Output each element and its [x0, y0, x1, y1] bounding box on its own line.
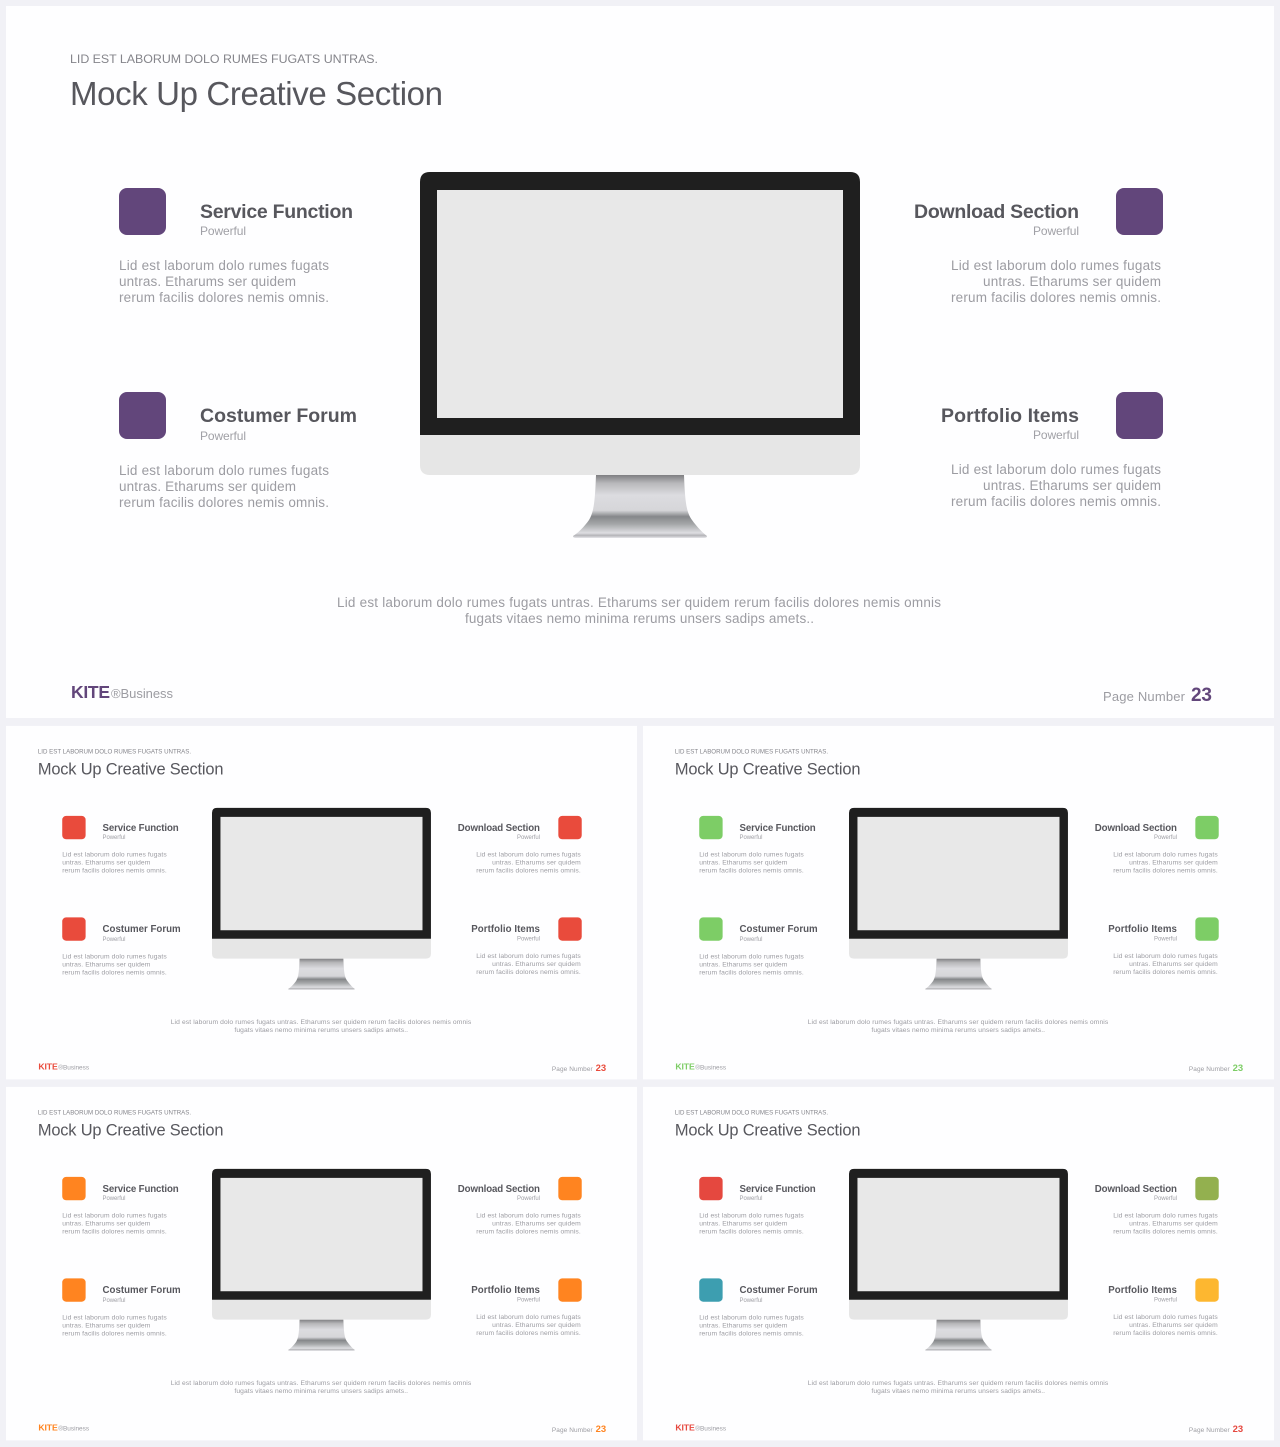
body text: rerum facilis dolores nemis omnis. [62, 969, 167, 976]
body text: rerum facilis dolores nemis omnis. [476, 868, 581, 875]
icon: rounded square [699, 1278, 723, 1302]
brand logo: KITE [38, 1422, 58, 1432]
heading: Download Section [1095, 823, 1177, 834]
body text: untras. Etharums ser quidem [1129, 860, 1218, 867]
feature: Download Section [1095, 1177, 1219, 1236]
icon: rounded square [1195, 816, 1219, 839]
slide: small orange [6, 1087, 637, 1440]
body text: untras. Etharums ser quidem [983, 478, 1161, 493]
subheading: Powerful [103, 1298, 125, 1304]
eyebrow text: LID EST LABORUM DOLO RUMES FUGATS UNTRAS. [675, 749, 828, 756]
body text: Lid est laborum dolo rumes fugats [62, 1315, 167, 1322]
monitor mockup [420, 172, 860, 538]
body text: untras. Etharums ser quidem [492, 1221, 581, 1228]
feature: Service Function [699, 816, 816, 875]
brand logo [38, 1422, 89, 1432]
icon: rounded square [1195, 1278, 1219, 1302]
eyebrow text: LID EST LABORUM DOLO RUMES FUGATS UNTRAS. [38, 749, 191, 756]
monitor mockup [849, 808, 1068, 990]
brand logo [675, 1061, 726, 1071]
body text: Lid est laborum dolo rumes fugats [476, 1314, 581, 1321]
icon: rounded square [62, 917, 86, 941]
feature: Download Section [458, 816, 582, 875]
body text: rerum facilis dolores nemis omnis. [951, 494, 1161, 509]
page number: 23 [596, 1063, 606, 1074]
body text: untras. Etharums ser quidem [1129, 1221, 1218, 1228]
footer paragraph: fugats vitaes nemo minima rerums unsers sadips amets.. [234, 1027, 408, 1034]
heading: Costumer Forum [740, 1285, 818, 1296]
body text [476, 1213, 581, 1236]
page number: Page Number [1103, 689, 1186, 704]
page number [1103, 685, 1212, 706]
body text: untras. Etharums ser quidem [492, 860, 581, 867]
body text: rerum facilis dolores nemis omnis. [1113, 1330, 1218, 1337]
subheading: Powerful [1033, 428, 1079, 442]
footer paragraph: fugats vitaes nemo minima rerums unsers sadips amets.. [465, 611, 814, 626]
body text: Lid est laborum dolo rumes fugats [699, 954, 804, 961]
body text: untras. Etharums ser quidem [1129, 1322, 1218, 1329]
brand logo: ®Business [111, 686, 174, 701]
brand logo: ®Business [58, 1063, 89, 1071]
icon: rounded square [119, 188, 166, 235]
icon: rounded square [62, 1278, 86, 1302]
body text: untras. Etharums ser quidem [1129, 961, 1218, 968]
body text: untras. Etharums ser quidem [119, 479, 296, 494]
body text: Lid est laborum dolo rumes fugats [951, 462, 1161, 477]
page number: 23 [596, 1424, 606, 1435]
body text: Lid est laborum dolo rumes fugats [119, 463, 329, 478]
body text: Lid est laborum dolo rumes fugats [1113, 852, 1218, 859]
body text: Lid est laborum dolo rumes fugats [62, 1213, 167, 1220]
heading: Costumer Forum [200, 405, 357, 427]
title: Mock Up Creative Section [38, 761, 223, 779]
heading: Portfolio Items [1108, 924, 1177, 935]
body text: rerum facilis dolores nemis omnis. [119, 495, 329, 510]
feature: Service Function [62, 816, 179, 875]
page number [552, 1424, 606, 1435]
body text [1113, 1314, 1218, 1337]
heading: Portfolio Items [941, 405, 1079, 427]
heading: Service Function [103, 1184, 179, 1195]
heading: Costumer Forum [740, 924, 818, 935]
subheading: Powerful [517, 937, 540, 943]
body text: untras. Etharums ser quidem [62, 860, 151, 867]
body text: untras. Etharums ser quidem [699, 1221, 788, 1228]
feature: Portfolio Items [941, 392, 1163, 509]
heading: Portfolio Items [471, 1285, 540, 1296]
feature: Costumer Forum [62, 917, 181, 976]
page number: Page Number [1189, 1066, 1231, 1073]
feature: Download Section [914, 188, 1163, 305]
feature: Portfolio Items [1108, 1278, 1219, 1337]
brand logo [38, 1061, 89, 1071]
body text: Lid est laborum dolo rumes fugats [951, 258, 1161, 273]
body text: rerum facilis dolores nemis omnis. [119, 290, 329, 305]
body text: rerum facilis dolores nemis omnis. [951, 290, 1161, 305]
brand logo [71, 682, 174, 702]
footer paragraph [808, 1380, 1109, 1395]
panel background [643, 726, 1274, 1079]
heading: Portfolio Items [471, 924, 540, 935]
body text: Lid est laborum dolo rumes fugats [476, 1213, 581, 1220]
slide: small red [6, 726, 637, 1079]
monitor mockup [212, 808, 431, 990]
body text [699, 1213, 804, 1236]
icon: rounded square [699, 1177, 723, 1200]
body text [951, 258, 1161, 305]
footer paragraph: Lid est laborum dolo rumes fugats untras. Etharums ser quidem rerum facilis dolores nemis omnis [171, 1019, 472, 1026]
brand logo: KITE [675, 1422, 695, 1432]
footer paragraph [171, 1019, 472, 1034]
icon: rounded square [558, 1278, 582, 1302]
body text: Lid est laborum dolo rumes fugats [476, 953, 581, 960]
heading: Service Function [103, 823, 179, 834]
eyebrow text: LID EST LABORUM DOLO RUMES FUGATS UNTRAS. [70, 52, 378, 66]
body text: rerum facilis dolores nemis omnis. [1113, 1229, 1218, 1236]
icon: rounded square [558, 1177, 582, 1200]
footer paragraph [808, 1019, 1109, 1034]
heading: Costumer Forum [103, 924, 181, 935]
brand logo: KITE [71, 682, 110, 702]
heading: Costumer Forum [103, 1285, 181, 1296]
body text [62, 954, 167, 976]
body text [1113, 1213, 1218, 1236]
feature: Costumer Forum [699, 1278, 818, 1337]
brand logo: KITE [38, 1061, 58, 1071]
heading: Portfolio Items [1108, 1285, 1177, 1296]
body text: Lid est laborum dolo rumes fugats [62, 954, 167, 961]
body text [62, 852, 167, 875]
footer paragraph: fugats vitaes nemo minima rerums unsers sadips amets.. [871, 1027, 1045, 1034]
icon: rounded square [558, 917, 582, 941]
title: Mock Up Creative Section [70, 75, 443, 112]
page number: 23 [1233, 1424, 1243, 1435]
subheading: Powerful [103, 835, 125, 841]
title: Mock Up Creative Section [675, 1122, 860, 1140]
heading: Download Section [458, 823, 540, 834]
subheading: Powerful [517, 1196, 540, 1202]
panel background [643, 1087, 1274, 1440]
body text [62, 1315, 167, 1337]
footer paragraph: fugats vitaes nemo minima rerums unsers sadips amets.. [234, 1388, 408, 1395]
footer paragraph: Lid est laborum dolo rumes fugats untras. Etharums ser quidem rerum facilis dolores nemis omnis [808, 1380, 1109, 1387]
body text: Lid est laborum dolo rumes fugats [119, 258, 329, 273]
icon: rounded square [699, 917, 723, 941]
body text: Lid est laborum dolo rumes fugats [699, 1315, 804, 1322]
body text: rerum facilis dolores nemis omnis. [62, 868, 167, 875]
body text [699, 954, 804, 976]
footer paragraph: Lid est laborum dolo rumes fugats untras. Etharums ser quidem rerum facilis dolores nemis omnis [808, 1019, 1109, 1026]
icon: rounded square [558, 816, 582, 839]
body text: Lid est laborum dolo rumes fugats [699, 1213, 804, 1220]
body text: untras. Etharums ser quidem [699, 1323, 788, 1330]
feature: Service Function [62, 1177, 179, 1236]
subheading: Powerful [200, 224, 246, 238]
eyebrow text: LID EST LABORUM DOLO RUMES FUGATS UNTRAS. [675, 1110, 828, 1117]
body text [951, 462, 1161, 509]
subheading: Powerful [1033, 224, 1079, 238]
heading: Download Section [914, 201, 1079, 223]
body text [476, 953, 581, 976]
panel background [6, 6, 1274, 718]
feature: Costumer Forum [119, 392, 357, 510]
feature: Costumer Forum [62, 1278, 181, 1337]
subheading: Powerful [103, 937, 125, 943]
body text: rerum facilis dolores nemis omnis. [476, 1229, 581, 1236]
page number [552, 1063, 606, 1074]
footer paragraph [337, 595, 941, 626]
brand logo: ®Business [695, 1063, 726, 1071]
body text: rerum facilis dolores nemis omnis. [699, 969, 804, 976]
page number: Page Number [552, 1427, 594, 1434]
heading: Download Section [1095, 1184, 1177, 1195]
body text [476, 852, 581, 875]
icon: rounded square [62, 1177, 86, 1200]
icon: rounded square [699, 816, 723, 839]
heading: Service Function [740, 1184, 816, 1195]
body text [476, 1314, 581, 1337]
body text [699, 852, 804, 875]
heading: Service Function [740, 823, 816, 834]
heading: Service Function [200, 201, 353, 223]
footer paragraph [171, 1380, 472, 1395]
body text: Lid est laborum dolo rumes fugats [1113, 953, 1218, 960]
title: Mock Up Creative Section [38, 1122, 223, 1140]
body text [699, 1315, 804, 1337]
body text: untras. Etharums ser quidem [699, 860, 788, 867]
heading: Download Section [458, 1184, 540, 1195]
icon: rounded square [62, 816, 86, 839]
page number: Page Number [1189, 1427, 1231, 1434]
subheading: Powerful [517, 1298, 540, 1304]
body text: rerum facilis dolores nemis omnis. [699, 868, 804, 875]
page number: Page Number [552, 1066, 594, 1073]
body text: rerum facilis dolores nemis omnis. [1113, 868, 1218, 875]
body text: Lid est laborum dolo rumes fugats [62, 852, 167, 859]
monitor mockup [212, 1169, 431, 1351]
footer paragraph: fugats vitaes nemo minima rerums unsers sadips amets.. [871, 1388, 1045, 1395]
brand logo [675, 1422, 726, 1432]
body text: Lid est laborum dolo rumes fugats [699, 852, 804, 859]
icon: rounded square [1195, 1177, 1219, 1200]
subheading: Powerful [740, 1298, 762, 1304]
subheading: Powerful [740, 1196, 762, 1202]
subheading: Powerful [740, 937, 762, 943]
panel background [6, 1087, 637, 1440]
subheading: Powerful [517, 835, 540, 841]
monitor mockup [849, 1169, 1068, 1351]
body text: untras. Etharums ser quidem [492, 961, 581, 968]
body text: rerum facilis dolores nemis omnis. [1113, 969, 1218, 976]
body text [1113, 852, 1218, 875]
feature: Service Function [119, 188, 353, 305]
body text: rerum facilis dolores nemis omnis. [699, 1229, 804, 1236]
slide: small green [643, 726, 1274, 1079]
body text [119, 258, 329, 305]
subheading: Powerful [200, 429, 246, 443]
feature: Download Section [1095, 816, 1219, 875]
body text: Lid est laborum dolo rumes fugats [1113, 1213, 1218, 1220]
body text [1113, 953, 1218, 976]
panel background [6, 726, 637, 1079]
subheading: Powerful [1154, 835, 1177, 841]
body text: rerum facilis dolores nemis omnis. [699, 1330, 804, 1337]
page number [1189, 1424, 1243, 1435]
body text: Lid est laborum dolo rumes fugats [476, 852, 581, 859]
footer paragraph: Lid est laborum dolo rumes fugats untras. Etharums ser quidem rerum facilis dolores nemis omnis [337, 595, 941, 610]
body text: rerum facilis dolores nemis omnis. [62, 1229, 167, 1236]
brand logo: ®Business [58, 1424, 89, 1432]
feature: Portfolio Items [471, 1278, 582, 1337]
feature: Portfolio Items [471, 917, 582, 976]
page number: 23 [1233, 1063, 1243, 1074]
brand logo: KITE [675, 1061, 695, 1071]
title: Mock Up Creative Section [675, 761, 860, 779]
feature: Costumer Forum [699, 917, 818, 976]
subheading: Powerful [1154, 937, 1177, 943]
body text [119, 463, 329, 510]
icon: rounded square [119, 392, 166, 439]
body text: untras. Etharums ser quidem [62, 1323, 151, 1330]
subheading: Powerful [1154, 1298, 1177, 1304]
feature: Portfolio Items [1108, 917, 1219, 976]
slide: small multicolor [643, 1087, 1274, 1440]
subheading: Powerful [1154, 1196, 1177, 1202]
body text: rerum facilis dolores nemis omnis. [476, 969, 581, 976]
slide: large purple [6, 6, 1274, 718]
body text: untras. Etharums ser quidem [62, 962, 151, 969]
eyebrow text: LID EST LABORUM DOLO RUMES FUGATS UNTRAS. [38, 1110, 191, 1117]
page number [1189, 1063, 1243, 1074]
body text: untras. Etharums ser quidem [983, 274, 1161, 289]
feature: Download Section [458, 1177, 582, 1236]
body text: untras. Etharums ser quidem [699, 962, 788, 969]
body text: rerum facilis dolores nemis omnis. [476, 1330, 581, 1337]
brand logo: ®Business [695, 1424, 726, 1432]
icon: rounded square [1116, 392, 1163, 439]
body text: untras. Etharums ser quidem [492, 1322, 581, 1329]
body text: Lid est laborum dolo rumes fugats [1113, 1314, 1218, 1321]
feature: Service Function [699, 1177, 816, 1236]
footer paragraph: Lid est laborum dolo rumes fugats untras. Etharums ser quidem rerum facilis dolores nemis omnis [171, 1380, 472, 1387]
icon: rounded square [1195, 917, 1219, 941]
subheading: Powerful [103, 1196, 125, 1202]
body text: untras. Etharums ser quidem [62, 1221, 151, 1228]
subheading: Powerful [740, 835, 762, 841]
page number: 23 [1191, 685, 1212, 706]
body text: untras. Etharums ser quidem [119, 274, 296, 289]
icon: rounded square [1116, 188, 1163, 235]
body text [62, 1213, 167, 1236]
body text: rerum facilis dolores nemis omnis. [62, 1330, 167, 1337]
